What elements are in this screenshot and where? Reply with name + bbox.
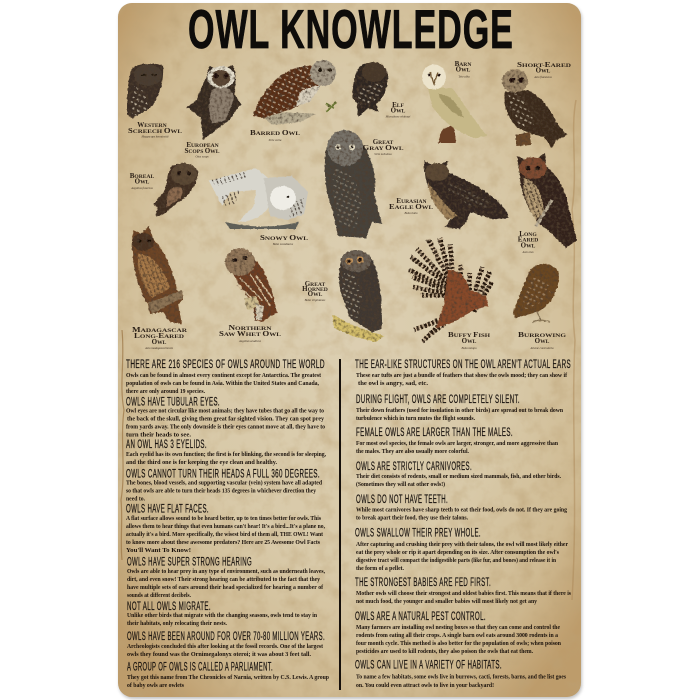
fact: parliament: They got this name from The Chronicles of Narnia, written by C.S. Lewis. A group [127, 674, 329, 681]
illustration [209, 168, 308, 229]
label: EURASIAN [396, 197, 427, 205]
fact: 3 eyelids: and the third one is for keeping the eye clean and healthy. [126, 459, 277, 466]
label [128, 121, 182, 138]
right column facts [355, 359, 571, 689]
fact: 216 species [126, 359, 325, 395]
fact: migration: their habitats, only relocating their nests. [127, 620, 227, 627]
fact: pest control: four month cycle. This method is also better for the population of owls; when poison [356, 640, 561, 647]
label: EAGLE OWL [389, 203, 433, 211]
fact: ear-like structures: the owl is angry, sad, etc. [358, 380, 428, 387]
label [518, 230, 538, 254]
fact: pest control [355, 611, 561, 655]
label [389, 197, 433, 215]
label: Asio flammeus [533, 75, 553, 79]
label: M ADAGASCAR [132, 326, 188, 334]
illustration [513, 264, 559, 322]
label: OWL [308, 290, 323, 298]
owl: western screech owl [127, 64, 182, 138]
label: Bubo scandiacus [273, 242, 294, 246]
label [385, 101, 411, 118]
label: Asio madagascariensis [144, 346, 174, 350]
parchment panel [118, 3, 581, 697]
fact: carnivores: OWLS ARE STRICTLY CARNIVORES. [356, 461, 472, 473]
fact: pest control: OWLS ARE A NATURAL PEST CONTROL. [355, 611, 486, 623]
fact: strong hearing: dirt, and even snow! Their strong hearing can be attributed to the fact that they [127, 576, 321, 583]
label: Bubo virginianus [305, 298, 326, 302]
owl: great horned owl [302, 250, 384, 342]
fact: females larger [356, 427, 558, 455]
fact: parliament [127, 662, 329, 689]
label: SHORT- EARED [517, 61, 571, 69]
label: OWL [462, 337, 477, 345]
fact: 3 eyelids [126, 439, 326, 466]
fact: 216 species: THERE ARE 216 SPECIES OF OWLS AROUND THE WORLD [126, 359, 325, 371]
owl: european scops owl [184, 65, 241, 158]
fact: habitats: OWLS CAN LIVE IN A VARIETY OF HABITATS. [355, 660, 502, 672]
label: OWL [535, 337, 550, 345]
fact: swallow prey: OWLS SWALLOW THEIR PREY WHOLE. [355, 528, 481, 540]
label: OWL [135, 178, 150, 186]
title: OWL KNOWLEDGE [188, 0, 513, 60]
fact: 360 degrees: so that owls are able to turn their heads 135 degrees in whichever direction they [126, 488, 317, 494]
label: Bubo bubo [404, 211, 418, 215]
fact: strongest babies: not much food, the younger and smaller babies will most likely not get any [356, 598, 538, 605]
column divider [339, 359, 341, 690]
fact: 216 species: Owls can be found in almost every continent except for Antarctica. The greatest [126, 372, 322, 379]
label: Strix varia [269, 138, 282, 142]
label [517, 61, 571, 79]
fact: females larger: the males. They are also usually more colorful. [356, 448, 469, 455]
fact: females larger: FEMALE OWLS ARE LARGER THAN THE MALES. [356, 427, 513, 439]
label [302, 280, 328, 302]
owl: elf owl [353, 62, 411, 118]
label: Otus scops [195, 154, 209, 158]
owl: madagascar long-eared owl [132, 226, 188, 350]
label: Tyto alba [458, 74, 470, 78]
label: LONG- EARED [134, 332, 184, 340]
illustration [187, 65, 241, 140]
illustration [409, 238, 492, 342]
illustration [325, 130, 382, 238]
fact: habitats: To name a few habitats, some owls live in burrows, cacti, forests, barns, and the list goes [356, 674, 566, 680]
fact: swallow prey: digestive tract will compact the indigestible parts (like fur, and bones) and release it in [356, 557, 556, 564]
label: GRAY OWL [362, 144, 404, 152]
panel shadow [119, 5, 582, 699]
illustration [153, 163, 198, 217]
label: HORNED [302, 285, 328, 293]
fact: flat faces: to know more about these awesome predators? Here are 25 Awesome Owl Facts [126, 539, 320, 546]
fact: strong hearing: have multiple sets of ears around their head specialized for hearing a number of [127, 584, 324, 591]
fact: migration: Unlike other birds that migrate with the changing seasons, owls tend to stay in [127, 612, 317, 619]
label [250, 129, 300, 142]
label: OWL [391, 106, 406, 114]
label [260, 234, 308, 246]
fact: strong hearing: OWLS HAVE SUPER STRONG HEARING [127, 556, 252, 568]
illustration [353, 62, 388, 117]
fact: swallow prey [355, 528, 568, 572]
fact: tubular eyes: from yards away. The only downside is their eyes cannot move at all, they have to [126, 424, 325, 430]
fact: 70-80 million years: Archeologists concluded this after looking at the fossil records. One of the largest [127, 643, 324, 650]
label [184, 141, 220, 158]
fact: habitats [355, 660, 566, 689]
fact: flat faces: You'll Want To Know! [126, 547, 191, 554]
fact: carnivores [356, 461, 561, 488]
fact: ear-like structures: These ear tufts are just a bundle of feathers that show the owls mood; they can show if [356, 372, 568, 379]
fact: 216 species: there are only around 19 species. [126, 388, 205, 395]
fact: flat faces: OWLS HAVE FLAT FACES. [126, 504, 209, 516]
label: SCREECH OWL [128, 127, 182, 135]
fact: parliament: of baby owls are owlets [127, 682, 184, 689]
label: OWL [536, 66, 551, 74]
label: Strix nebulosa [374, 152, 392, 156]
fact: strongest babies: THE STRONGEST BABIES ARE FED FIRST. [355, 577, 491, 589]
illustration [424, 161, 508, 229]
illustration [225, 248, 277, 322]
label: OWL [521, 242, 536, 250]
label: Micrathene whitneyi [385, 114, 411, 118]
fact: 3 eyelids: Each eyelid has its own function; the first is for blinking, the second is for sleeping, [126, 451, 326, 458]
owl: northern saw whet owl [219, 248, 281, 343]
fact: swallow prey: eat the prey whole or rip it apart depending on its size. After consumption the owl's [356, 549, 559, 556]
fact: swallow prey: After capturing and crushing their prey with their talons, the owl will most likely either [356, 541, 568, 548]
fact: flat faces: allows them to hear things that even humans can't hear! It's a bird...It's a plane no, [126, 523, 325, 530]
fact: pest control: Many farmers are installing owl nesting boxes so that they can come and control the [356, 624, 560, 631]
fact: 3 eyelids: AN OWL HAS 3 EYELIDS. [126, 439, 207, 451]
label: BARRED OWL [250, 129, 300, 137]
left column facts [126, 359, 329, 689]
fact: flat faces: A flat surface allows sound to be heard better, up to ten times better for owls. This [126, 515, 321, 522]
fact: migration [127, 601, 317, 627]
illustration [132, 226, 183, 324]
fact: females larger: For most owl species, the female owls are larger, stronger, and more aggressive than [356, 440, 558, 447]
fact: no teeth: to break apart their food, they use their talons. [356, 514, 468, 522]
fact: strong hearing: sounds at different decibels. [127, 592, 191, 599]
fact: no teeth: OWLS DO NOT HAVE TEETH. [356, 494, 448, 506]
fact: no teeth [356, 494, 568, 522]
owl: great gray owl [325, 130, 404, 238]
fact: 70-80 million years [127, 631, 325, 658]
fact: strongest babies: Mother owls will choose their strongest and oldest babies first. This means that if there is [356, 590, 571, 597]
owl: eurasian eagle owl [389, 161, 508, 229]
illustration [332, 250, 384, 342]
owl: long eared owl [517, 153, 577, 254]
fact: flat faces: actually it's a bird. More specifically, the wisest bird of them all, THE OWL! Want [126, 531, 324, 538]
label [132, 326, 188, 350]
owl: short-eared owl [502, 61, 571, 148]
label: ELF [392, 101, 404, 109]
illustration [422, 64, 487, 143]
fact: carnivores: Their diet consists of rodents, small or medium sized mammals, fish, and other birds. [356, 473, 561, 480]
owl: buffy fish owl [409, 238, 492, 350]
fact: flat faces [126, 504, 325, 554]
fact: 360 degrees: need to. [126, 496, 145, 502]
fact: silent flight [356, 394, 563, 422]
fact: 360 degrees: OWLS CANNOT TURN THEIR HEADS A FULL 360 DEGREES. [126, 468, 320, 480]
fact: parliament: A GROUP OF OWLS IS CALLED A PARLIAMENT. [127, 662, 273, 674]
label: Bubo ketupu [461, 346, 477, 350]
fact: carnivores: (Sometimes they will eat other owls!) [356, 481, 445, 488]
label: WESTERN [137, 121, 167, 129]
fact: pest control: rodents from eating all their crops. A single barn owl eats around 3000 rodents in a [356, 632, 559, 639]
label [455, 60, 471, 78]
fact: strong hearing: Owls are able to hear prey in any type of environment, such as underneath leaves, [127, 568, 325, 575]
illustration [127, 64, 163, 118]
label: SNOWY O WL [260, 234, 308, 242]
owl: barred owl [250, 60, 336, 142]
label [448, 331, 491, 350]
fact: silent flight: Their down feathers (used for insulation in other birds) are spread out to break down [356, 407, 563, 414]
fact: 360 degrees [126, 468, 322, 502]
label [518, 331, 567, 350]
fact: silent flight: DURING FLIGHT, OWLS ARE COMPLETELY SILENT. [356, 394, 520, 406]
fact: 216 species: population of owls can be found in Asia. Within the United States and Canada, [126, 380, 319, 387]
fact: silent flight: turbulence which in turn mutes the flight sounds. [356, 415, 475, 422]
label: OWL [456, 66, 471, 74]
owl: barn owl [422, 60, 487, 143]
label: BUFFY FISH [448, 331, 491, 339]
label: LONG [519, 230, 537, 238]
label: SAW W HET O WL [219, 330, 281, 338]
label: OWL [152, 338, 167, 346]
label: BURROWING [518, 331, 567, 339]
fact: tubular eyes [126, 396, 325, 438]
fact: tubular eyes: turn their heads to see. [126, 432, 191, 438]
label: GREAT [373, 138, 394, 146]
label: BARN [455, 60, 471, 68]
label: GREAT [305, 280, 326, 288]
label: N ORTHERN [228, 324, 272, 332]
owl: burrowing owl [513, 264, 567, 350]
fact: tubular eyes: the back of the skull, giving them great far sighted vision. They can spot prey [127, 416, 325, 422]
owl: boreal owl [130, 163, 198, 217]
label: SCOPS OWL [184, 147, 220, 155]
fact: ear-like structures [355, 359, 571, 387]
fact: no teeth: While most carnivores have sharp teeth to eat their food, owls do not. If they are going [356, 506, 568, 514]
label: Aegolius funereus [130, 186, 154, 190]
label: EARED [518, 236, 538, 244]
fact: pest control: pesticides are used to kill rodents, they also poison the owls that eat them. [356, 648, 533, 655]
label: EUROPEAN [186, 141, 219, 149]
fact: swallow prey: the form of a pellet. [356, 565, 404, 572]
fact: 70-80 million years: OWLS HAVE BEEN AROUND FOR OVER 70-80 MILLION YEARS. [127, 631, 325, 643]
label: BOREAL [130, 172, 155, 180]
fact: 70-80 million years: owls they found was the Ornimegalonyx oteroi; it was about 3 feet tall. [127, 651, 311, 658]
illustration [502, 70, 567, 148]
fact: 360 degrees: The bones, blood vessels, and supporting vascular (vein) system have all adapted [126, 480, 322, 486]
owl: snowy owl [209, 168, 308, 246]
label: Megascops kennicottii [141, 134, 169, 138]
fact: habitats: on. You could even attract owls to live in your backyard! [356, 682, 494, 689]
label [362, 138, 404, 156]
label [219, 324, 281, 343]
fact: migration: NOT ALL OWLS MIGRATE. [127, 601, 211, 613]
label: Aegolius acadicus [238, 339, 262, 343]
illustration [517, 153, 577, 248]
label: Asio otus [521, 250, 534, 254]
label [130, 172, 155, 190]
fact: strong hearing [127, 556, 325, 599]
illustration [253, 60, 336, 125]
fact: strongest babies [355, 577, 571, 605]
fact: tubular eyes: Owl eyes are not circular like most animals; they have tubes that go all the way to [126, 408, 324, 414]
fact: tubular eyes: OWLS HAVE TUBULAR EYES. [126, 396, 220, 408]
label: Athene cunicularia [530, 346, 554, 350]
